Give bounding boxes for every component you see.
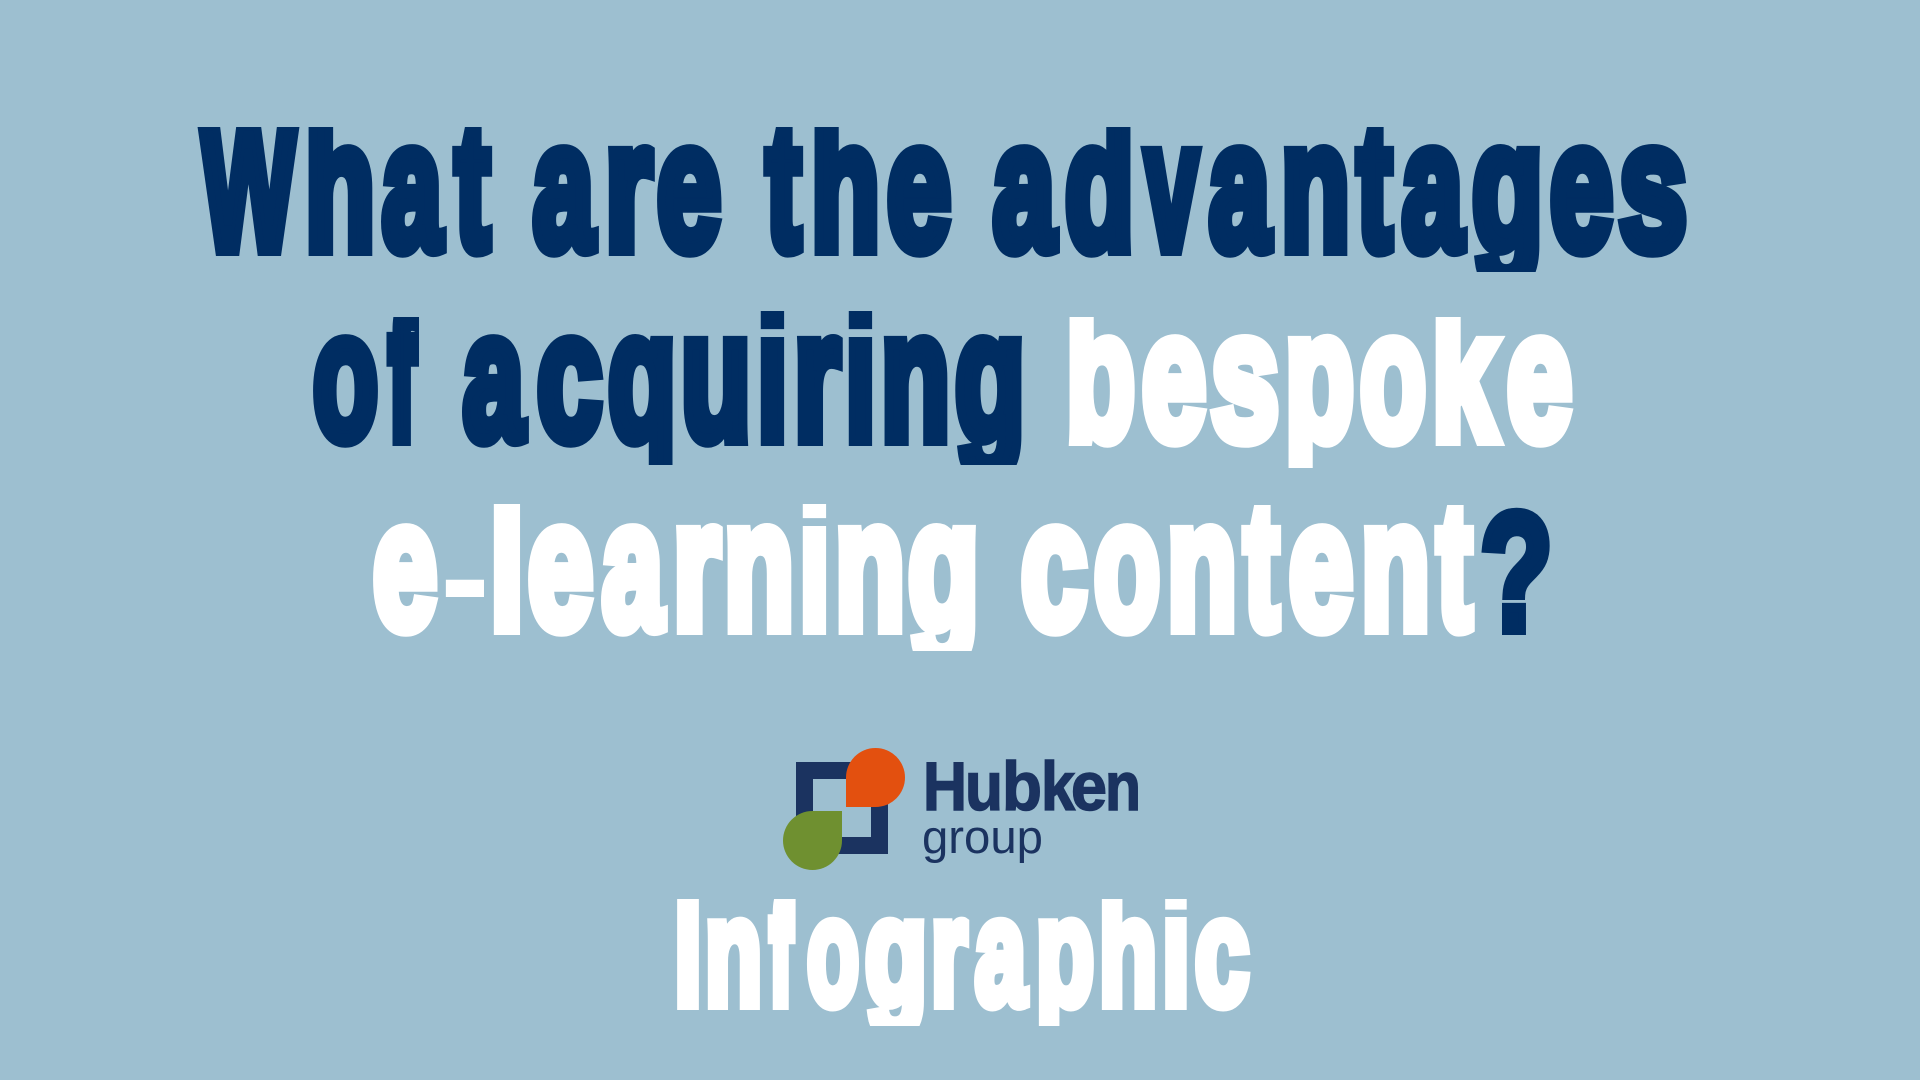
title line 2: p [1285, 274, 1354, 478]
subtitle: Infographic: g [865, 867, 927, 1036]
title line 1: t [1357, 84, 1392, 288]
icon: navy square frame [796, 762, 888, 854]
icon: green drop [783, 811, 842, 870]
title line 1: g [1472, 84, 1543, 288]
title line 3: n [1167, 463, 1237, 667]
title line 2: e [1142, 274, 1206, 478]
title line 3: ? [1480, 478, 1553, 666]
logo wordmark: Hubken: u [965, 748, 1003, 825]
title line 3: g [908, 463, 979, 667]
title line 1: a [533, 84, 595, 288]
title line 1: a [1209, 84, 1271, 288]
title line 1: a [382, 84, 443, 288]
title line 2: n [881, 274, 950, 478]
title line 1: t [766, 84, 801, 288]
title line 2: g [955, 274, 1025, 478]
title line 1: h [811, 84, 880, 288]
logo wordmark: Hubken: n [1105, 748, 1141, 825]
title line 3: c [1021, 463, 1087, 667]
title line 1: e [657, 84, 721, 288]
title line 2: f [389, 272, 415, 476]
title line 3: e [373, 463, 437, 667]
title line 1: n [1281, 84, 1350, 288]
title line 1 [198, 127, 1687, 272]
title line 1: s [1619, 84, 1687, 288]
logo wordmark: Hubken: k [1041, 748, 1076, 825]
title line 2: o [1360, 274, 1426, 478]
title line 1: v [1145, 84, 1198, 288]
subtitle: Infographic: i [1160, 861, 1192, 1041]
title line 3: e [1289, 463, 1353, 667]
title line 1: a [993, 84, 1056, 288]
title line 3: t [1244, 463, 1279, 667]
title line 3 [373, 504, 1550, 651]
title [198, 127, 1687, 651]
subtitle: Infographic: o [807, 867, 859, 1036]
title line 2: r [794, 274, 840, 478]
title line 3: n [835, 463, 905, 667]
title line 2: q [608, 274, 676, 478]
logo wordmark: Hubken: H [923, 748, 967, 825]
title line 1: e [887, 84, 951, 288]
title line 3: r [673, 463, 720, 667]
subtitle: Infographic: a [975, 867, 1027, 1036]
title line 3: - [445, 528, 485, 634]
logo: Hubken group [783, 748, 1141, 870]
title line 2: a [463, 274, 525, 478]
subtitle: Infographic [677, 899, 1250, 1026]
title line 3: t [1437, 463, 1472, 667]
subtitle: Infographic: c [1195, 867, 1249, 1036]
icon: orange drop [846, 748, 905, 807]
title line 2 [313, 311, 1574, 468]
title line 3: o [1094, 463, 1160, 667]
title line 3: i [798, 460, 832, 670]
subtitle: Infographic: f [770, 865, 792, 1034]
title line 3: e [528, 463, 593, 667]
title line 2: b [1066, 274, 1135, 478]
title line 2: i [844, 271, 878, 481]
title line 1: r [605, 84, 652, 288]
subtitle: Infographic: p [1036, 867, 1094, 1036]
title line 2: i [756, 271, 790, 481]
title line 2: e [1507, 274, 1572, 478]
title line 3: n [1361, 463, 1430, 667]
title line 1: d [1065, 84, 1134, 288]
title line 3: l [490, 463, 524, 667]
title line 3: n [724, 463, 794, 667]
title line 3: a [602, 463, 664, 667]
subtitle: Infographic: r [931, 867, 967, 1036]
subtitle: Infographic: n [705, 867, 762, 1036]
logo wordmark: Hubken: e [1071, 748, 1107, 825]
subtitle: Infographic: I [674, 867, 702, 1036]
title line 2: o [313, 274, 378, 478]
logo wordmark: group: group [922, 810, 1043, 863]
title line 2: u [681, 274, 751, 478]
title line 2: c [537, 274, 602, 478]
logo wordmark: Hubken: b [1002, 748, 1042, 825]
title line 1: e [1550, 84, 1613, 288]
title line 1: a [1402, 84, 1464, 288]
title line 2: k [1432, 274, 1497, 478]
title line 2: s [1211, 274, 1279, 478]
title line 1: W [201, 84, 296, 288]
subtitle: Infographic: h [1099, 867, 1157, 1036]
title line 1: t [455, 84, 490, 288]
title line 1: h [305, 84, 375, 288]
